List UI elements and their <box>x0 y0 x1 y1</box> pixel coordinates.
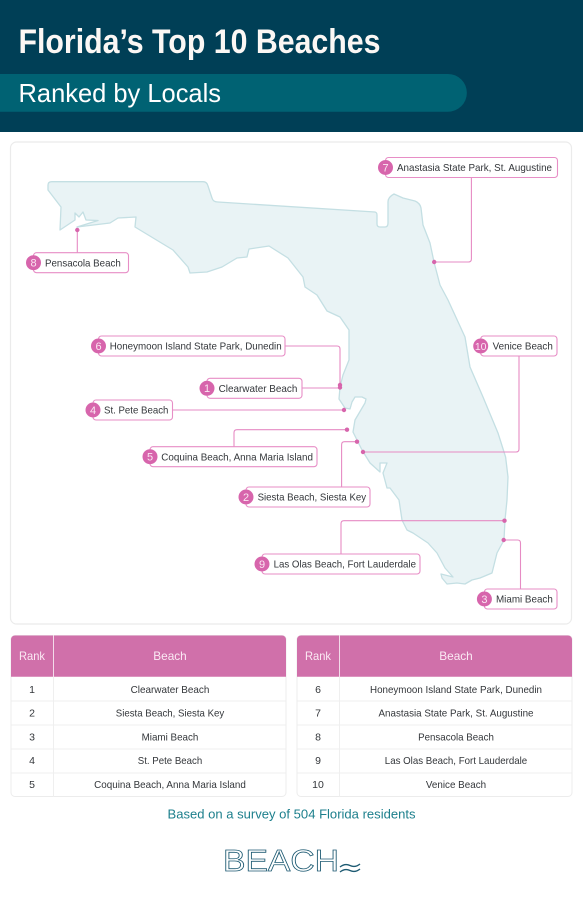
callout: 1 Clearwater Beach: Clearwater Beach <box>219 383 298 395</box>
table rows: Anastasia State Park, St. Augustine <box>378 708 534 720</box>
table rows: 9 <box>315 755 321 767</box>
table rows: Siesta Beach, Siesta Key <box>116 708 225 720</box>
callout: 9 Las Olas Beach <box>254 518 507 574</box>
callout: 3 Miami Beach <box>477 538 557 609</box>
callout: 2 Siesta Beach <box>238 440 370 507</box>
callout: 5 Coquina Beach <box>142 428 349 467</box>
table rows: 8 <box>315 731 321 743</box>
callout: 4 St. Pete Beach: St. Pete Beach <box>104 405 169 417</box>
callout: 3 Miami Beach: 3 <box>481 594 487 606</box>
table header: Beach <box>439 649 473 663</box>
header banner <box>0 0 583 132</box>
table: ranks 1 to 5 <box>11 636 286 796</box>
table rows: 4 <box>29 755 35 767</box>
table rows: 7 <box>315 708 321 720</box>
callout: 1 Clearwater Beach: 1 <box>204 383 210 395</box>
table rows: Venice Beach <box>426 779 486 791</box>
callout: 6 Honeymoon Island: 6 <box>95 341 102 353</box>
table header: Rank <box>305 649 332 663</box>
callout: 7 Anastasia State Park: 7 <box>382 162 389 174</box>
callout: 9 Las Olas Beach: Las Olas Beach, Fort Lauderdale <box>274 559 416 571</box>
table rows <box>312 684 542 791</box>
logo: BEACH <box>223 844 339 878</box>
table rows: 1 <box>29 684 35 696</box>
callout: 5 Coquina Beach: 5 <box>147 452 153 464</box>
table rows: St. Pete Beach <box>138 755 202 767</box>
callout: 6 Honeymoon Island <box>91 336 342 387</box>
table header <box>19 649 187 663</box>
callout: 7 Anastasia State Park: Anastasia State Park, St. Augustine <box>397 162 552 174</box>
table rows: 3 <box>29 731 35 743</box>
callout: 4 St. Pete Beach: 4 <box>90 405 96 417</box>
callout: 10 Venice Beach: Venice Beach <box>493 341 553 353</box>
callout: 2 Siesta Beach: Siesta Beach, Siesta Key <box>258 492 367 504</box>
subtitle pill <box>0 74 467 112</box>
table rows: 10 <box>312 779 324 791</box>
callout: 8 Pensacola Beach: 8 <box>30 258 37 270</box>
table rows: Honeymoon Island State Park, Dunedin <box>370 684 542 696</box>
table rows: Coquina Beach, Anna Maria Island <box>94 779 246 791</box>
callout: 5 Coquina Beach: Coquina Beach, Anna Maria Island <box>161 451 313 463</box>
title: Florida’s Top 10 Beaches <box>18 23 380 61</box>
table: ranks 6 to 10 <box>297 636 572 796</box>
callout: 10 Venice Beach <box>361 336 557 454</box>
table header <box>305 649 473 663</box>
table rows: 6 <box>315 684 321 696</box>
callout: 7 Anastasia State Park <box>378 158 558 264</box>
table rows <box>29 684 246 791</box>
callout: 8 Pensacola Beach: Pensacola Beach <box>45 257 121 269</box>
table rows: Clearwater Beach <box>131 684 210 696</box>
callout: 4 St. Pete Beach <box>86 400 346 420</box>
table rows: 5 <box>29 779 35 791</box>
table rows: Las Olas Beach, Fort Lauderdale <box>385 755 527 767</box>
callout: 10 Venice Beach: 10 <box>475 341 487 353</box>
callout: 1 Clearwater Beach <box>200 378 342 398</box>
table header: Beach <box>153 649 187 663</box>
table rows: 2 <box>29 708 35 720</box>
subtitle pill: Ranked by Locals <box>18 78 221 108</box>
callout: 9 Las Olas Beach: 9 <box>259 559 265 571</box>
source note: Based on a survey of 504 Florida residents <box>168 806 416 822</box>
table rows: Pensacola Beach <box>418 731 494 743</box>
map of Florida <box>48 182 508 584</box>
callout: 8 Pensacola Beach <box>26 228 128 273</box>
table header: Rank <box>19 649 46 663</box>
callout: 3 Miami Beach: Miami Beach <box>496 594 553 606</box>
callout: 2 Siesta Beach: 2 <box>243 492 249 504</box>
callout: 6 Honeymoon Island: Honeymoon Island State Park, Dunedin <box>110 341 282 353</box>
icon: waves <box>340 864 360 872</box>
table rows: Miami Beach <box>142 731 199 743</box>
panel: map <box>10 142 572 624</box>
